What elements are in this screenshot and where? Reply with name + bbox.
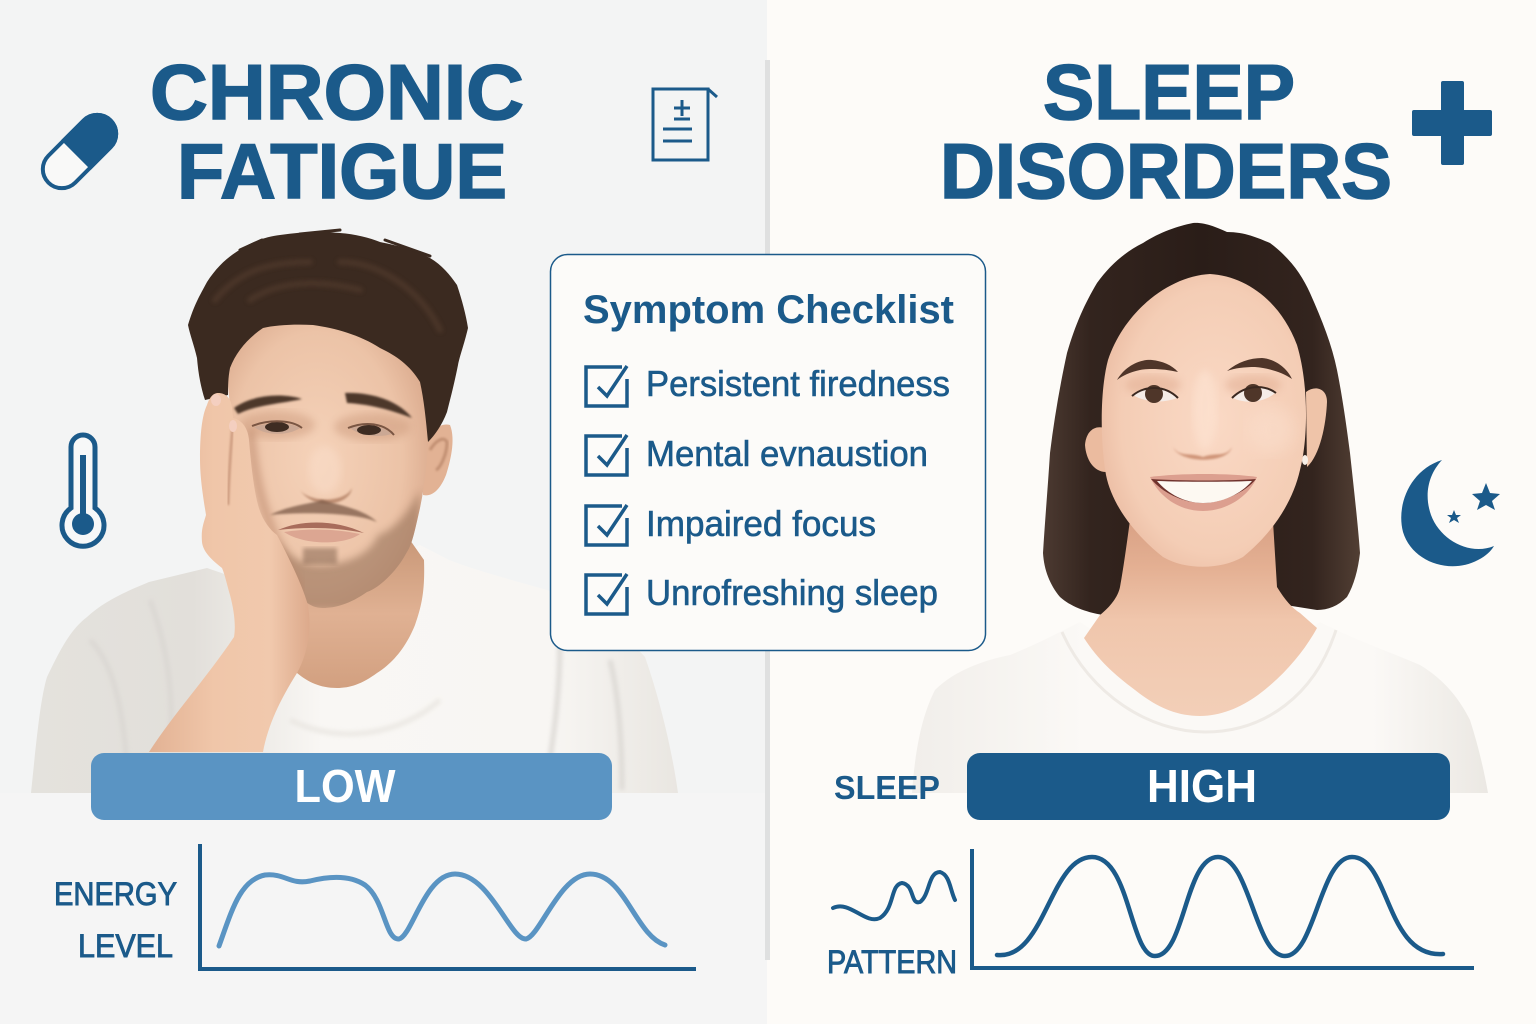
man finger line: [228, 422, 233, 505]
icon: medical document: [653, 89, 717, 160]
right panel background: [767, 0, 1536, 1024]
man eyebrows: [234, 396, 302, 414]
man mouth: [278, 522, 364, 533]
high bar: [967, 753, 1450, 820]
woman ears: [1085, 427, 1106, 472]
man ear: [422, 424, 453, 495]
man hand and forearm: [149, 393, 310, 752]
title: chronic fatigue: CHRONIC: [150, 48, 524, 136]
title: sleep disorders: SLEEP: [1043, 48, 1295, 136]
low bar: LOW: [294, 760, 396, 812]
icon: moon and stars: [1401, 460, 1500, 566]
panel: symptom checklist: [550, 254, 986, 650]
man eye sockets: [239, 411, 315, 439]
low bar: [91, 753, 612, 820]
man hair: [188, 232, 468, 442]
checklist heading: Symptom Checklist: [583, 288, 954, 332]
woman face: [1102, 274, 1306, 567]
energy level label: ENERGY: [54, 876, 177, 912]
checklist item 3: Impaired focus: [646, 503, 876, 544]
left panel background: [0, 0, 767, 1024]
icon: squiggle wave: [833, 872, 955, 919]
woman neck: [1084, 505, 1317, 716]
woman portrait: [912, 223, 1488, 793]
man portrait: [31, 230, 678, 793]
man hair strands: [215, 230, 440, 330]
man eyes: [254, 423, 300, 434]
man beard: [278, 490, 420, 610]
title: sleep disorders: DISORDERS: [940, 127, 1392, 215]
pattern label: PATTERN: [827, 944, 957, 980]
title: chronic fatigue: [150, 48, 524, 215]
chart: energy level: [200, 844, 696, 969]
woman eyes: [1133, 389, 1177, 401]
energy level label: [54, 876, 177, 964]
woman cheek glow: [1259, 416, 1288, 445]
man mustache: [270, 500, 377, 522]
woman earring: [1302, 455, 1308, 465]
man shirt: [31, 545, 678, 793]
checklist item 1: Persistent firedness: [646, 363, 950, 404]
man neck: [297, 540, 424, 688]
bottom strip left: [0, 793, 767, 1024]
title: chronic fatigue: FATIGUE: [177, 127, 507, 215]
woman eyebrows: [1117, 360, 1178, 380]
woman eye sockets: [1125, 375, 1181, 395]
man cheek shadow beside hand: [246, 428, 288, 555]
checklist item 4: Unrofreshing sleep: [646, 572, 938, 613]
woman mouth interior: [1151, 479, 1256, 503]
energy level label: LEVEL: [78, 928, 173, 964]
bottom strip right: [767, 793, 1536, 1024]
title: sleep disorders: [940, 48, 1392, 215]
woman lips: [1150, 474, 1257, 511]
woman teeth: [1157, 481, 1252, 503]
woman collar: [1062, 630, 1336, 732]
woman hair: [1043, 223, 1360, 615]
chart: sleep pattern: [972, 849, 1474, 968]
woman shirt: [912, 622, 1488, 793]
icon: pill: [34, 104, 127, 197]
man face: [225, 309, 429, 608]
woman nose bridge: [1196, 374, 1213, 444]
sleep label: SLEEP: [834, 769, 940, 806]
checklist item 2: Mental evnaustion: [646, 433, 928, 474]
man shirt folds: [90, 600, 622, 790]
man nose shade: [300, 488, 352, 504]
center divider: [765, 60, 770, 960]
high bar: HIGH: [1147, 760, 1257, 812]
woman nose: [1173, 447, 1232, 460]
icon: medical cross: [1414, 83, 1490, 163]
icon: thermometer: [62, 435, 104, 546]
